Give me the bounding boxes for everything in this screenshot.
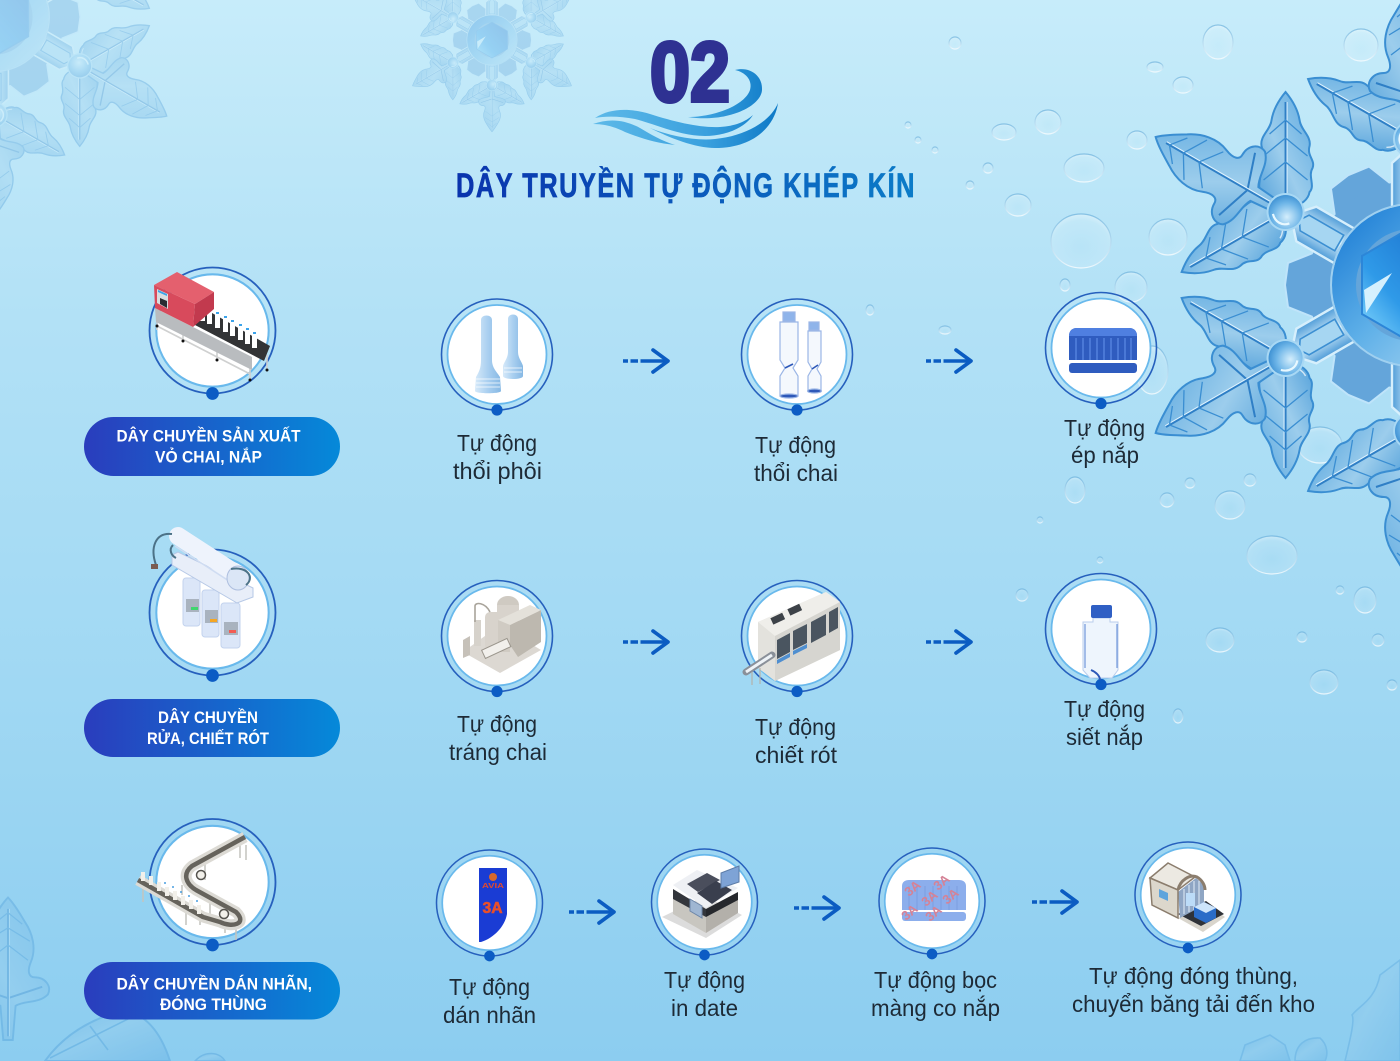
icon: packing machine	[1150, 863, 1225, 932]
pill label: DÂY CHUYỀN DÁN NHÃN,	[116, 974, 312, 994]
step: Tự động in date	[651, 849, 758, 1021]
label: màng co nắp	[871, 995, 1000, 1021]
arrow	[794, 897, 839, 919]
arrow	[1032, 891, 1077, 913]
pill label: RỬA, CHIẾT RÓT	[147, 729, 270, 748]
arrow	[569, 901, 614, 923]
icon: capped bottle	[1083, 605, 1118, 680]
step: Tự động bọc màng co nắp	[871, 848, 1000, 1021]
label: dán nhãn	[443, 1002, 536, 1028]
icon: 3A label: AVIA	[482, 883, 504, 890]
icon: 3A label	[479, 868, 507, 942]
icon: shrink-wrapped cap: 3A	[922, 902, 945, 924]
icon: rinsing machine	[463, 596, 541, 673]
pill label	[84, 417, 340, 476]
label: chiết rót	[755, 742, 838, 768]
label: ép nắp	[1071, 442, 1139, 468]
label: tráng chai	[449, 739, 547, 765]
label: thổi phôi	[453, 458, 542, 484]
snowflake: faded top centre	[394, 0, 590, 132]
label: chuyển băng tải đến kho	[1072, 991, 1315, 1017]
label: Tự động	[1064, 415, 1145, 441]
label: Tự động	[755, 432, 836, 458]
pill label: ĐÓNG THÙNG	[160, 995, 267, 1014]
snowflake: faded bottom right	[1240, 960, 1400, 1061]
panel: line 1 bottle and cap production	[84, 268, 340, 476]
section number with wave logo	[593, 25, 778, 148]
step: Tự động đóng thùng, chuyển băng tải đến kho	[1072, 842, 1315, 1017]
label: Tự động	[755, 714, 836, 740]
pill label	[84, 699, 340, 757]
wave logo	[593, 69, 778, 148]
icon: filling machine	[746, 592, 840, 685]
icon: date printer	[662, 866, 742, 938]
snowflake: faded top left	[0, 0, 206, 215]
label: Tự động	[449, 974, 530, 1000]
label: Tự động	[1064, 696, 1145, 722]
icon: shrink-wrapped cap	[898, 871, 966, 924]
icon: shrink-wrapped cap: 3A	[901, 877, 924, 899]
icon: shrink-wrapped cap: 3A	[898, 901, 921, 923]
water droplets	[866, 25, 1397, 723]
number 02: 02	[650, 25, 730, 119]
step: Tự động ép nắp	[1046, 292, 1156, 468]
pill label: VỎ CHAI, NẮP	[155, 448, 262, 466]
step: Tự động chiết rót	[742, 580, 852, 768]
label: Tự động	[457, 711, 537, 737]
icon: preforms	[475, 314, 523, 393]
pill label: DÂY CHUYỀN	[158, 708, 258, 727]
icon: cap	[1069, 328, 1137, 373]
label: Tự động	[457, 430, 537, 456]
panel: line 2 washing and filling	[84, 534, 340, 757]
label: thổi chai	[754, 460, 838, 486]
step: Tự động tráng chai	[442, 580, 552, 765]
icon: 3A label: 3A	[482, 900, 503, 917]
pill label: DÂY CHUYỀN SẢN XUẤT	[116, 426, 301, 446]
label: Tự động	[664, 967, 745, 993]
label: in date	[671, 995, 738, 1021]
title: DÂY TRUYỀN TỰ ĐỘNG KHÉP KÍN	[456, 166, 916, 205]
icon: S conveyor	[138, 819, 275, 951]
pill label	[84, 962, 340, 1020]
arrow	[623, 350, 668, 372]
icon: shrink-wrapped cap: 3A	[918, 887, 941, 909]
snowflake: large right	[1097, 0, 1400, 581]
label: Tự động bọc	[874, 967, 997, 993]
step: Tự động siết nắp	[1046, 574, 1156, 750]
arrow	[926, 350, 971, 372]
label: siết nắp	[1066, 724, 1143, 750]
icon: shrink-wrapped cap: 3A	[930, 871, 953, 893]
step: Tự động thổi phôi	[442, 299, 552, 484]
icon: filter cartridges	[150, 534, 275, 682]
icon: shrink-wrapped cap: 3A	[939, 885, 962, 907]
step: Tự động thổi chai	[742, 299, 852, 486]
panel: line 3 labelling and packing	[84, 819, 340, 1020]
snowflake: faded bottom left	[0, 898, 225, 1061]
icon: conveyor machine	[150, 268, 275, 400]
label: Tự động đóng thùng,	[1089, 963, 1298, 989]
step: Tự động dán nhãn	[436, 850, 543, 1028]
arrow	[623, 631, 668, 653]
arrow	[926, 631, 971, 653]
icon: bottles	[780, 312, 822, 398]
